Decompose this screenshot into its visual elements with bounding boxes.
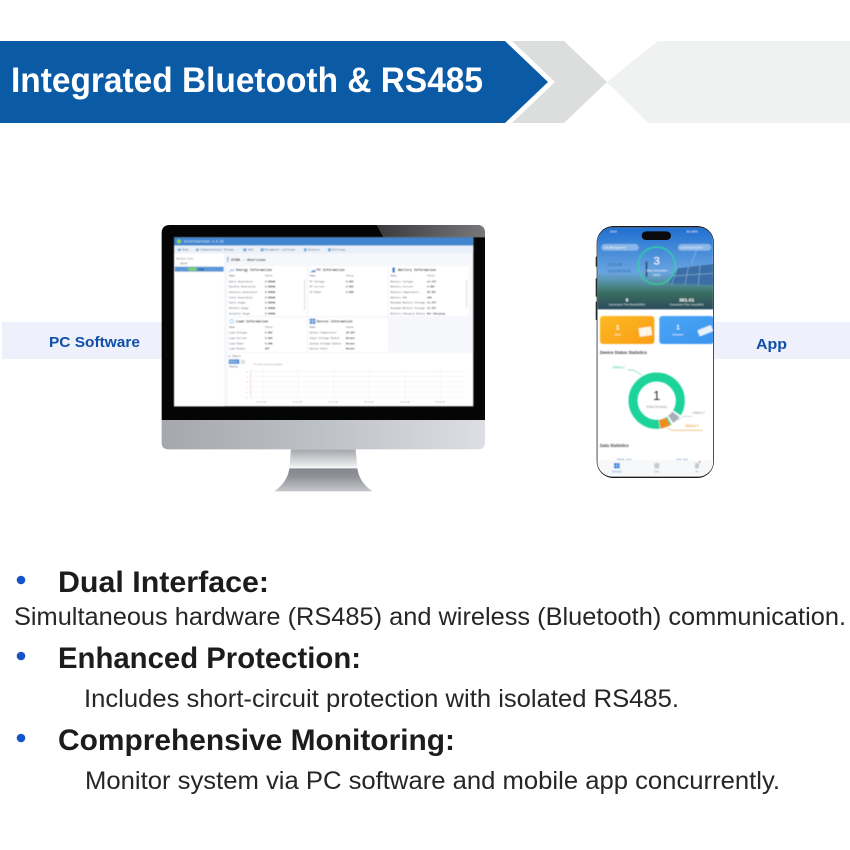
grey chevron (512, 41, 607, 123)
device information panel: Name (310, 326, 316, 329)
device status statistics: 15.01 (676, 458, 689, 464)
feature: Enhanced Protection: Includes short-circuit protection with isolated RS485. (84, 685, 679, 713)
energy information panel (228, 266, 307, 316)
toolbar: Communication Params (200, 248, 234, 252)
PV information panel: PV Current (310, 286, 325, 289)
battery information panel: Name (391, 275, 397, 278)
load information panel: OFF (265, 348, 270, 351)
energy information panel: 0.00kWh (265, 296, 276, 299)
energy information panel: 0.00kWh (265, 307, 276, 310)
device information panel: Input Voltage Status (310, 337, 340, 340)
chart panel: 10:18:00 (364, 400, 374, 403)
hero with solar panels: 5G 100% (687, 230, 698, 234)
tab bar: Overview (612, 471, 622, 474)
chart panel: Value (230, 361, 238, 364)
energy information panel: 0.00kWh (265, 280, 276, 283)
hero with solar panels: Life Management (604, 245, 626, 249)
phone frame (596, 226, 714, 478)
battery information panel: 13.34T (427, 307, 436, 310)
chart panel: 10:19:00 (400, 400, 410, 403)
PV information panel: PV Voltage (310, 280, 325, 283)
load information panel: Load Status (229, 348, 246, 351)
battery information panel: Battery Charging Status (391, 312, 425, 315)
device information panel: 26.90T (346, 332, 355, 335)
hero with solar panels: 10:14 (610, 230, 617, 234)
label band: PC Software: PC Software (49, 334, 140, 351)
tab bar: Me (695, 472, 699, 474)
software window (174, 237, 473, 406)
chart panel: Status (229, 366, 239, 369)
device sidebar: XB7XP (180, 262, 188, 265)
tab bar: Data (654, 471, 660, 474)
device information panel: Normal (346, 342, 355, 345)
battery information panel: 13.37V (427, 280, 436, 283)
load information panel: Load Voltage (229, 332, 247, 335)
title bar: SolarGuardian 2.0.32 (184, 239, 224, 243)
PV information panel: PV Power (310, 291, 322, 294)
energy information panel: Name (229, 275, 235, 278)
battery information panel: Not Charging (427, 312, 445, 315)
feature: Comprehensive Monitoring (17, 724, 780, 795)
monitor body (162, 225, 485, 449)
hero with solar panels: 381.01 (679, 297, 695, 303)
battery information panel: Battery Voltage (391, 280, 414, 283)
device status statistics: Total Devices (646, 405, 667, 409)
notch (642, 231, 671, 240)
load information panel (228, 318, 307, 352)
tab bar (612, 461, 700, 474)
hero with solar panels (597, 227, 713, 309)
title bar (174, 237, 473, 246)
chart panel: 4 (247, 375, 249, 378)
toolbar: History (308, 248, 320, 252)
overview heading (227, 257, 266, 263)
chart panel: 10:20:00 (435, 400, 446, 403)
hero with solar panels: (kWh) (653, 273, 660, 277)
energy information panel: Annually Usage (229, 312, 250, 315)
hero with solar panels: Daily Generation (646, 269, 668, 273)
feature: Comprehensive Monitoring: Monitor system via PC software and mobile app concurrently. (85, 767, 780, 795)
site card: 1 (616, 326, 620, 332)
battery information panel: Maximum Battery Voltage (391, 302, 425, 305)
load information panel: Load Information (236, 319, 268, 323)
devices card: Devices (673, 333, 684, 337)
device status statistics: Online 1 (612, 365, 625, 369)
energy information panel: 0.00kWh (265, 312, 276, 315)
energy information panel: Daily Usage (229, 302, 246, 305)
PV information panel (308, 266, 388, 316)
device status statistics: Device Status Statistics (600, 350, 648, 355)
title: Integrated Bluetooth & RS485 (11, 61, 483, 100)
chart panel (228, 353, 473, 406)
hero with solar panels: 3 (654, 256, 660, 268)
toolbar: Home (182, 249, 189, 252)
chart panel: 3 (247, 381, 249, 384)
device status statistics: Data Statistics (600, 443, 629, 448)
PV information panel: 0.00A (346, 286, 354, 289)
device information panel (308, 318, 388, 352)
hero with solar panels: 8 (626, 297, 629, 303)
load information panel: Value (265, 326, 273, 329)
device information panel: Normal (346, 337, 355, 340)
status donut (633, 377, 680, 424)
device status statistics: 1 (653, 389, 660, 403)
battery information panel: Value (427, 275, 435, 278)
battery information panel: 100 (427, 296, 432, 299)
energy information panel: Daily Generation (229, 280, 253, 283)
label band: App (712, 322, 850, 359)
device information panel: System Voltage Status (310, 342, 341, 345)
PV information panel: Name (310, 275, 316, 278)
toolbar: Add (248, 248, 253, 252)
desktop monitor showing PC software (162, 225, 485, 491)
battery information panel: Battery SOC (391, 296, 408, 299)
device sidebar: XTRA (198, 268, 204, 271)
PV information panel: Value (346, 275, 354, 278)
battery information panel: 13.37V (427, 302, 436, 305)
battery information panel: 25.00T (427, 291, 436, 294)
overview heading: XTRA - Overview (231, 258, 266, 263)
PV information panel: 0.00W (346, 291, 354, 294)
feature: Enhanced Protection (17, 642, 679, 713)
load information panel: 0.00W (265, 342, 273, 345)
device information panel: Device Temperature (310, 332, 337, 335)
battery information panel: Battery Temperature (391, 291, 420, 294)
toolbar: Settings (332, 248, 346, 252)
devices card (659, 316, 714, 344)
chart panel: 1 Chart (228, 354, 241, 358)
load information panel: Load Power (229, 342, 244, 345)
load information panel: Load Current (229, 337, 247, 340)
battery information panel (389, 266, 469, 316)
PV information panel: 0.00V (346, 280, 354, 283)
phone screen (597, 227, 714, 480)
chart panel: 1 (247, 391, 249, 394)
battery information panel: 0.00A (427, 286, 435, 289)
device information panel: Device Fault (310, 348, 328, 351)
feature list (14, 566, 846, 795)
feature: Enhanced Protection: Enhanced Protection: (58, 642, 361, 675)
smartphone showing mobile app (596, 226, 714, 480)
toolbar: Parameter settings (265, 248, 296, 252)
device status statistics: Offline 0 (692, 411, 705, 415)
hero with solar panels: Generation This Year(kWh) (670, 303, 704, 307)
battery information panel: Battery Current (391, 286, 414, 289)
hero with solar panels: GUARDIAN (607, 269, 631, 274)
devices card: 1 (676, 326, 680, 332)
energy information panel: Total Generation (229, 296, 253, 299)
monitor stand (274, 449, 372, 491)
battery information panel: Battery Information (398, 268, 436, 272)
hero with solar panels: SOLAR (607, 262, 623, 267)
label band: PC Software (2, 322, 167, 359)
header banner (0, 41, 850, 123)
chart panel: 10:17:00 (328, 400, 339, 403)
light grey chevron (607, 41, 850, 123)
hero with solar panels: Generation This Month(kWh) (609, 303, 645, 307)
chart panel: 10:16:00 (293, 400, 303, 403)
feature: Dual Interface: Dual Interface: (58, 566, 269, 599)
feature: Comprehensive Monitoring: Comprehensive Monitoring: (58, 724, 455, 757)
load information panel: 0.00A (265, 337, 273, 340)
chart panel: Daily Generation(kWh) (257, 363, 282, 366)
load information panel: Name (229, 326, 235, 329)
label band: App: App (756, 336, 787, 353)
energy information panel: 0.00kWh (265, 302, 276, 305)
energy information panel: Monthly Usage (229, 307, 249, 310)
chart panel: 10:15:00 (257, 400, 267, 403)
load information panel: 0.00V (265, 332, 273, 335)
feature: Dual Interface: Simultaneous hardware (RS485) and wireless (Bluetooth) communication. (14, 603, 846, 631)
device status statistics: Alarms 0 (685, 424, 699, 428)
device sidebar (174, 253, 224, 406)
PV information panel: PV Information (317, 268, 345, 272)
device information panel: Value (346, 326, 354, 329)
energy information panel: Value (265, 275, 273, 278)
blue arrow band (0, 41, 548, 123)
site card (600, 316, 654, 344)
hero with solar panels: Local Connection (681, 245, 703, 249)
chart panel: 0 (246, 397, 248, 400)
device status statistics: 381.01 (617, 458, 632, 464)
device sidebar: Device List (177, 257, 194, 260)
energy information panel: Annually Generation (229, 291, 258, 294)
device information panel: Device Information (317, 319, 353, 323)
energy information panel: 0.00kWh (265, 291, 276, 294)
battery information panel: Minimum Battery Voltage (391, 307, 425, 310)
device status statistics (597, 350, 713, 480)
energy information panel: 0.00kWh (265, 286, 276, 289)
site card: Sites (614, 333, 621, 337)
chart panel: 5 (247, 370, 249, 373)
toolbar (174, 246, 473, 253)
device information panel: Normal (346, 348, 355, 351)
feature: Dual Interface (14, 566, 846, 631)
energy information panel: Monthly Generation (229, 286, 256, 289)
chart panel: 2 (247, 386, 249, 389)
energy information panel: Energy Information (236, 268, 272, 272)
